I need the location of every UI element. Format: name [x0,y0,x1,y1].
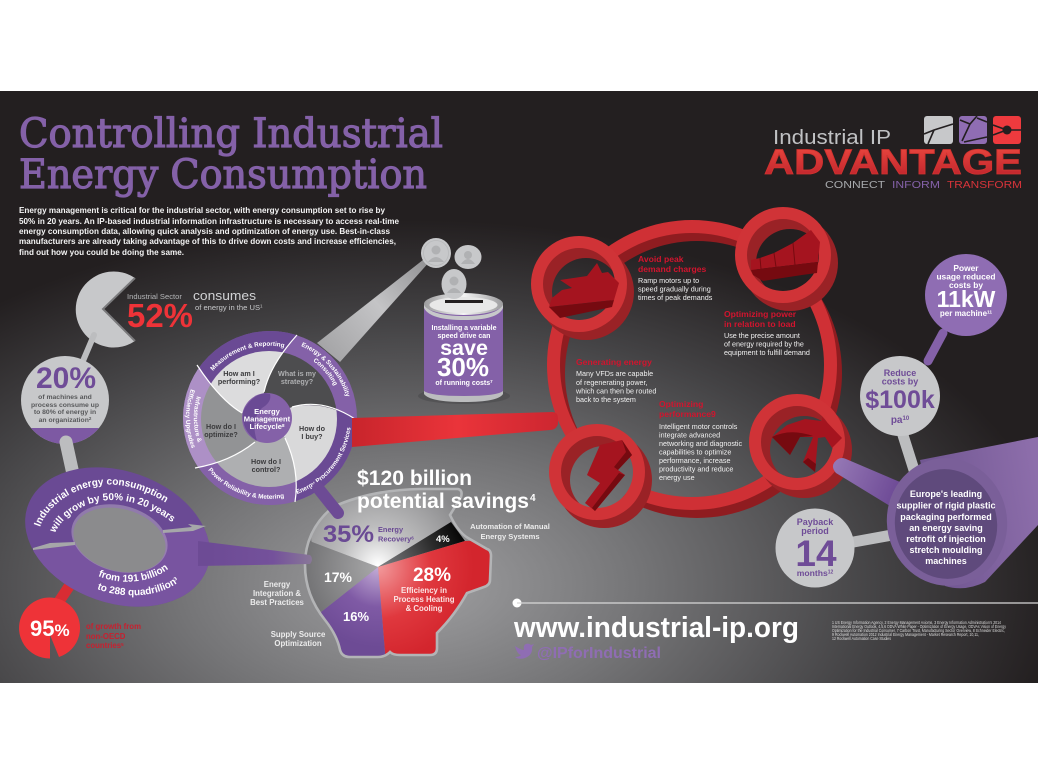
text: optimizing performance: integrate advanced [659,430,720,440]
coin three [442,269,466,299]
text: optimizing power: in relation to load [724,319,796,329]
text: optimizing performance: performance, increase [659,456,731,465]
red bar connecting wheel to loop [352,412,558,447]
intro text block: manufacturers are already taking advantage of this to drive down costs and increase efficiencies, [19,236,396,246]
chart labels: Best Practices [250,598,305,607]
connector pacman to 20% [80,335,94,368]
beam from wheel to coin [317,256,431,362]
52% stat [127,288,263,334]
text: generating energy [575,357,656,404]
sector questions: I buy? [301,432,323,441]
intro text block: 50% in 20 years. An IP-based industrial information infrastructure is necessary to access real-time [19,216,399,226]
coins [421,238,482,299]
footnotes: 12 Rockwell Automation Case Studies [832,636,891,641]
can text: of running costs [435,380,490,387]
Europe text: an energy saving [909,523,983,533]
logo tagline [825,180,1022,191]
52% stat: 1 [260,304,263,308]
ring labels: Power Reliability & Metering [208,468,284,500]
11kW circle: 11 [987,310,992,316]
intro text block: Energy management is critical for the industrial sector, with energy consumption set to rise by [19,205,385,215]
chart labels: Efficiency in [401,586,447,595]
logo tagline: INFORM [892,180,940,191]
connector payback to tube [848,535,892,543]
sector: optimize [201,384,256,462]
text: avoid peak demand: speed gradually during [638,284,711,294]
chart labels: 28% [413,565,451,586]
chart labels: 17% [324,569,353,585]
sector questions: How do I [251,457,281,466]
sector questions: What is my [278,369,316,378]
20% circle: process consume up [31,402,99,409]
sector questions: strategy? [281,377,313,386]
twitter icon [515,644,534,659]
sector: performing [211,351,282,413]
chart labels [250,521,550,648]
payback circle [776,508,854,588]
footer rule [512,598,1038,608]
can text: 7 [490,379,493,384]
growth arrow left [33,542,75,550]
loop band [547,220,842,518]
can text: 30% [437,352,489,382]
95% caption: of growth from [86,622,141,631]
text: optimizing performance: capabilities to optimize [659,448,731,456]
ring: procurement [296,410,352,501]
title: Controlling Industrial [19,111,443,157]
52% stat: 52% [127,297,193,334]
95% pie [19,598,141,659]
Europe text: Europe's leading [910,489,982,499]
Europe text: supplier of rigid plastic [896,500,996,510]
coin one [421,238,451,268]
growth arrow right [163,524,206,533]
chart labels: 16% [343,609,369,624]
intro text block [19,205,399,257]
52% stat: Industrial Sector [127,292,182,301]
sector questions [204,369,326,474]
text: generating energy: back to the system [576,395,636,404]
95% caption: countries [86,641,121,650]
loop ring: peak [531,236,634,340]
curved text: 3 [174,577,177,580]
slice 28% [378,540,490,654]
curved text: Industrial energy consumption [34,479,168,526]
logo wordmark: Industrial IP [773,127,891,149]
growth ellipse ring [25,467,209,607]
center hub: Lifecycle [249,422,282,431]
ring labels: Measurement & Reporting [210,342,284,371]
slice 17% [306,541,378,612]
coin two [454,245,482,269]
sector: buy [284,405,337,481]
loop ring: load [735,207,838,311]
Europe case study tube [875,437,1038,597]
11kW circle [925,254,1007,336]
intro text block: find out how you could be doing the same. [19,247,184,257]
payback circle: period [801,526,829,536]
logo tagline: CONNECT [825,180,885,191]
sector questions: performing? [218,377,260,386]
text: optimizing power [724,309,810,357]
text: avoid peak demand: demand charges [638,264,707,274]
ring labels: Energy Procurement Services [296,428,350,494]
Europe text: machines [925,556,967,566]
center hub: 8 [282,423,285,428]
chart labels: 35% [323,521,374,548]
95% caption: non-OECD [86,632,126,641]
chart labels: Optimization [274,639,322,648]
Europe text: packaging performed [900,512,992,522]
sector: control [217,436,296,487]
sector questions: How do [299,424,326,433]
20% circle: of machines and [38,394,92,401]
ring labels: Efficiency Upgrades [184,389,195,448]
$100k circle: pa [891,415,902,426]
energy savings can [418,293,510,404]
footnotes: 1 US Energy Information Agency, 2 Energy Management Axioms, 3 Energy Information Administration's 2014 [832,620,1001,625]
divider lines [195,335,355,502]
text: optimizing performance: networking and diagnostic [659,439,743,448]
95% caption: 5 [121,642,124,647]
intro text block: energy consumption data, allowing quick analysis and optimization of energy use. Best-in-class [19,226,390,236]
loop ring: regenerate [549,424,652,528]
sector questions: control? [252,465,280,474]
chart labels: 4% [436,534,450,545]
95% pie: 95% [30,616,70,641]
text: generating energy: Generating energy [576,357,652,367]
chart labels: Energy [264,580,291,589]
connector 20% to ellipse [66,442,73,474]
icon: peak arrow [549,263,619,318]
center hub [242,393,292,443]
logo tagline: TRANSFORM [947,180,1022,191]
logo icon: purple block [959,116,987,144]
footnotes: 9 Rockwell Automation 2012 Industrial Energy Management - Market Research Report, 10,11, [832,632,979,637]
payback circle: 12 [828,570,834,576]
95% caption [86,622,141,650]
title: Energy Consumption [19,152,427,198]
text: optimizing power: Optimizing power [724,309,797,319]
52% stat: consumes [193,288,257,303]
ring labels [184,342,350,500]
center hub: Management [244,414,291,424]
payback circle: 14 [795,533,837,574]
text: optimizing power: equipment to fulfill demand [724,348,810,357]
$100k circle: $100k [865,386,935,414]
Europe text: retrofit of injection [906,534,986,544]
Europe text: stretch moulding [909,545,983,555]
sector questions: How am I [223,369,255,378]
piggy bank savings chart [198,467,550,665]
curved text: will grow by 50% in 20 years [50,493,174,532]
slice 16% [321,567,386,665]
logo icon: red block [993,116,1021,144]
ring labels: Infrastructure & [194,396,202,442]
pacman 52% pie [76,272,263,348]
text: optimizing performance: energy use [659,473,695,482]
20% circle: 2 [89,416,92,421]
wedge from ellipse to pig [198,541,312,566]
savings heading [357,467,536,513]
logo icon: gray block [924,116,953,144]
chart labels: Energy Systems [480,532,540,541]
red loop [531,207,852,528]
11kW circle: per machine [940,309,987,318]
website url: www.industrial-ip.org [513,612,799,644]
slice 35% [312,490,460,567]
20% circle: an organization [39,417,89,424]
logo ADVANTAGE: ADVANTAGE [764,143,1022,182]
ring labels: Consulting [314,358,337,386]
chart labels: Energy [378,525,404,534]
purple wedge to loop [833,458,900,506]
lifecycle wheel [183,331,357,505]
Europe text [896,489,996,566]
chart labels: Automation of Manual [470,522,550,531]
$100k circle: 10 [902,416,910,422]
icon: lightning bolt [585,440,632,511]
can text: Installing a variable [432,325,497,332]
background panel [0,91,1038,683]
center hub: Energy [254,407,281,416]
text: avoid peak demand: Ramp motors up to [638,276,699,285]
icon: rising bars [751,230,820,281]
ring: infrastructure [183,368,216,467]
savings heading: potential savings [357,490,529,513]
20% circle: to 80% of energy in [34,409,96,416]
title [19,111,443,198]
savings heading: 4 [530,493,536,504]
payback circle: months [797,568,828,578]
loop ring: performance [749,394,852,498]
20% circle: 20% [36,362,96,395]
text: avoid peak demand: times of peak demands [638,293,713,302]
can text: save [440,336,488,360]
text: optimizing performance: productivity and reduce [659,464,733,474]
text: optimizing performance: performance9 [659,409,716,419]
text: avoid peak demand: Avoid peak [638,254,684,264]
11kW circle: costs by [949,280,983,290]
can text [432,325,497,387]
footnotes [832,620,1007,641]
savings heading: $120 billion [357,467,472,490]
can text: speed drive can [438,333,490,340]
chart labels: & Cooling [406,604,443,613]
chart labels: Recovery [378,534,411,544]
logo: Industrial IP Advantage [764,116,1022,191]
sector questions: How do I [206,422,236,431]
purple connector wheel to pig [318,488,338,513]
slice 4% [378,522,465,567]
text: generating energy: Many VFDs are capable [576,369,653,378]
$100k circle: costs by [882,376,918,386]
icon: gauge [772,417,842,472]
curved text: from 191 billion [98,565,168,582]
52% stat: of energy in the US [195,303,260,312]
text: optimizing performance: Optimizing [659,399,703,409]
connector 11kW to $100k [928,333,943,361]
11kW circle: 11kW [937,286,996,312]
20% circle [21,356,109,444]
ring: power reliability bottom [199,468,294,505]
footnotes: Optimization for the Industrial Consumer, 7 Carbon Trust, Manufacturing Sector Overview, 8 Schneider Electric, [832,628,1005,633]
ring: measurement [200,331,296,384]
$100k circle [860,356,940,436]
ring labels: Energy & Sustainability [301,342,350,396]
chart labels: 6 [411,536,414,540]
curved text: to 288 quadrillion [98,580,176,598]
text: generating energy: which can then be routed [575,386,656,396]
chart labels: Supply Source [271,630,326,639]
connector $100k to tube [902,432,914,470]
curved text [34,479,177,598]
11kW circle: Power [953,263,979,273]
text: optimizing power: Use the precise amount [724,331,800,340]
text: generating energy: of regenerating power, [576,378,648,387]
payback circle: Payback [797,517,834,527]
text: optimizing performance: Intelligent motor controls [659,422,738,431]
sector questions: optimize? [204,430,238,439]
sector: strategy [264,352,336,410]
twitter handle: @IPforIndustrial [537,645,661,662]
text: avoid peak demand [638,254,713,302]
11kW circle: usage reduced [936,272,996,282]
$100k circle: Reduce [884,368,916,378]
text: optimizing performance [659,399,743,482]
chart labels: Integration & [253,589,301,598]
chart labels: Process Heating [393,595,455,604]
text: optimizing power: of energy required by the [724,340,804,348]
red connector to 95% [56,585,70,606]
